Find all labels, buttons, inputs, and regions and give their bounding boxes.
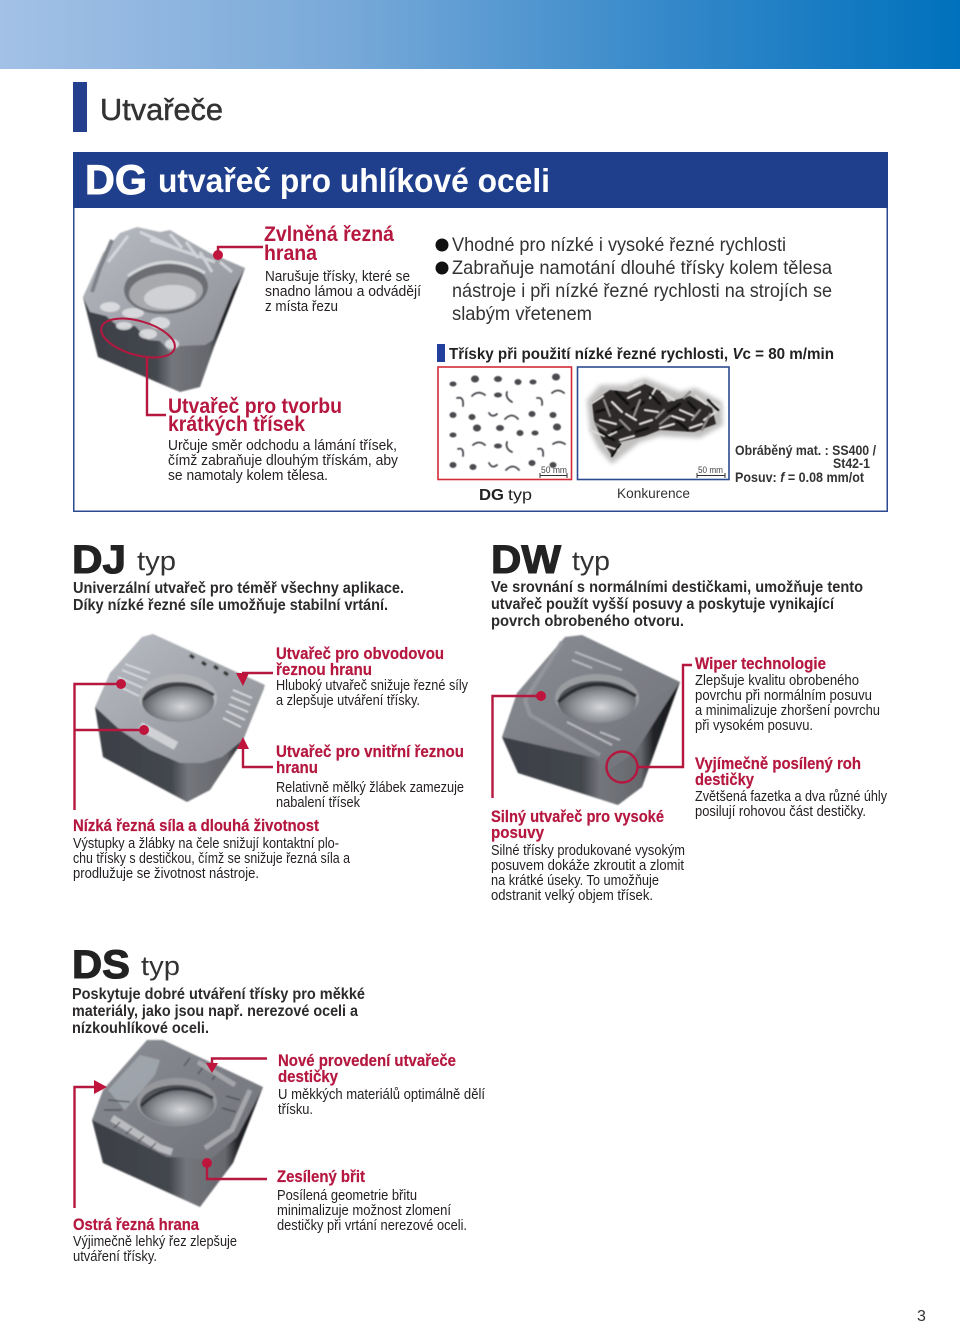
callout: DW strong former: na krátké úseky. To umožňuje [491, 873, 659, 889]
bullet list: slabým vřetenem [452, 303, 592, 325]
insert photo: DJ [95, 634, 265, 802]
heading: DJ type: Díky nízké řezné síle umožňuje stabilní vrtání. [73, 597, 388, 614]
bullet list: Zabraňuje namotání dlouhé třísky kolem tělesa [452, 257, 832, 279]
callout: DW wiper and corner [606, 654, 888, 820]
callout: DJ peripheral edge former: Hluboký utvařeč snižuje řezné síly [276, 678, 469, 694]
callout: DJ inner edge former [237, 737, 464, 811]
callout: DW wiper and corner: destičky [695, 770, 754, 789]
callout: DW strong former: posuvy [491, 823, 544, 842]
callout: DW wiper and corner: a minimalizuje zhoršení povrchu [695, 703, 880, 719]
callout: DJ peripheral edge former: Utvařeč pro obvodovou [276, 644, 444, 663]
panel heading [73, 152, 888, 208]
cutting conditions: St42-1 [833, 455, 870, 471]
callout: DS new design [206, 1051, 485, 1118]
callout: DJ peripheral edge former: řeznou hranu [276, 660, 372, 679]
callout: DW wiper and corner: Zlepšuje kvalitu obrobeného [695, 673, 859, 689]
insert photo: DW [502, 635, 680, 805]
chip photo captions [479, 485, 690, 504]
chip photo captions: Konkurence [617, 485, 690, 501]
callout: DS reinforced edge: Zesílený břit [277, 1167, 365, 1186]
callout: DW strong former: Silný utvařeč pro vysoké [491, 807, 664, 826]
heading: DS type: materiály, jako jsou např. nerezové oceli a [72, 1003, 358, 1020]
cutting conditions: Posuv: f = 0.08 mm/ot [735, 469, 864, 485]
callout: DW strong former: Silné třísky produkované vysokým [491, 843, 685, 859]
bullet list: nástroje i při nízké řezné rychlosti na strojích se [452, 280, 832, 302]
heading: DW type [491, 538, 863, 630]
callouts: DJ low cutting force: prodlužuje se životnost nástroje. [73, 866, 259, 882]
heading: DW type: utvařeč použít vyšší posuvy a poskytuje vynikající [491, 596, 835, 613]
callout: DJ peripheral edge former [236, 644, 469, 709]
heading: DJ type: Univerzální utvařeč pro téměř všechny aplikace. [73, 580, 404, 597]
callout: wavy cutting edge: hrana [264, 242, 317, 265]
callouts: DJ low cutting force [73, 679, 351, 882]
callout: DS sharp edge: utváření třísky. [73, 1249, 157, 1265]
callout: wavy cutting edge: snadno lámou a odvádějí [265, 284, 421, 300]
chip photo: DG type [438, 367, 572, 480]
callout: short-chip former: Určuje směr odchodu a lámání třísek, [168, 438, 397, 454]
callout: DW wiper and corner: Wiper technologie [695, 654, 826, 673]
heading: DW type: Ve srovnání s normálními destičkami, umožňuje tento [491, 579, 863, 596]
callout: DW wiper and corner: povrchu při normálním posuvu [695, 688, 872, 704]
callout: wavy cutting edge [213, 223, 421, 315]
callout: wavy cutting edge: Zvlněná řezná [264, 223, 394, 246]
callout: short-chip former: čímž zabraňuje dlouhým třískám, aby [168, 453, 399, 469]
title: Utvařeče [73, 82, 223, 132]
heading: DJ type: DJ [72, 538, 126, 582]
chip photo: competitor [578, 367, 729, 480]
heading: DS type: nízkouhlíkové oceli. [72, 1020, 209, 1037]
callout: DW strong former: odstranit velký objem třísek. [491, 888, 653, 904]
heading: DW type: typ [572, 546, 610, 576]
callout: DS reinforced edge: minimalizuje možnost zlomení [277, 1203, 451, 1219]
callout: short-chip former: krátkých třísek [168, 413, 305, 436]
callout: DW strong former [491, 691, 685, 904]
callout: DW wiper and corner: při vysokém posuvu. [695, 718, 813, 734]
title: Utvařeče: Utvařeče [100, 92, 223, 127]
heading: DS type: Poskytuje dobré utváření třísky pro měkké [72, 986, 365, 1003]
panel heading: utvařeč pro uhlíkové oceli [158, 162, 550, 199]
insert photo: DG [83, 227, 245, 392]
cutting conditions: Obráběný mat. : SS400 / [735, 442, 876, 458]
chip photo captions: DG [479, 487, 504, 504]
callout: DJ inner edge former: Utvařeč pro vnitřní řeznou [276, 742, 464, 761]
heading: DS type [72, 943, 365, 1037]
cutting conditions [735, 442, 876, 485]
callout: DJ inner edge former: nabalení třísek [276, 795, 361, 811]
heading: DJ type: typ [137, 546, 176, 576]
callout: DS new design: třísku. [278, 1102, 313, 1118]
callout: DS new design: Nové provedení utvařeče [278, 1051, 456, 1070]
callout: DJ inner edge former: hranu [276, 758, 318, 777]
callouts: DJ low cutting force: Výstupky a žlábky na čele snižují kontaktní plo- [73, 836, 339, 852]
chip comparison heading: Třísky při použití nízké řezné rychlosti, Vc = 80 m/min [449, 346, 834, 363]
callout: DW wiper and corner: Vyjímečně posílený roh [695, 754, 861, 773]
callout: wavy cutting edge: Narušuje třísky, které se [265, 269, 410, 285]
callout: DW wiper and corner: Zvětšená fazetka a dva různé úhly [695, 789, 888, 805]
callout: DS sharp edge: Výjimečně lehký řez zlepšuje [73, 1234, 237, 1250]
callout: DS reinforced edge: destičky při vrtání nerezové oceli. [277, 1218, 467, 1234]
panel heading: DG [85, 156, 147, 203]
bullet list: Vhodné pro nízké i vysoké řezné rychlosti [452, 234, 786, 256]
callout: short-chip former: Utvařeč pro tvorbu [168, 395, 342, 418]
heading: DW type: DW [491, 538, 561, 582]
callout: DJ inner edge former: Relativně mělký žlábek zamezuje [276, 780, 464, 796]
panel: DG chipbreaker [73, 152, 888, 511]
callout: short-chip former: se namotaly kolem tělesa. [168, 468, 328, 484]
callout: DW strong former: posuvem dokáže zkroutit a zlomit [491, 858, 684, 874]
callout: DJ peripheral edge former: a zlepšuje utváření třísky. [276, 693, 420, 709]
chip photo captions: typ [508, 487, 532, 504]
heading: DW type: povrch obrobeného otvoru. [491, 613, 684, 630]
callout: DS new design: destičky [278, 1067, 338, 1086]
callout: wavy cutting edge: z místa řezu [265, 299, 338, 315]
callout: DS reinforced edge: Posílená geometrie břitu [277, 1188, 417, 1204]
callout: DW wiper and corner: posilují rohovou část destičky. [695, 804, 866, 820]
callout: DS sharp edge: Ostrá řezná hrana [73, 1215, 199, 1234]
scale bars [540, 465, 725, 478]
callouts: DJ low cutting force: Nízká řezná síla a dlouhá životnost [73, 816, 319, 835]
callouts: DJ low cutting force: chu třísky s destičkou, čímž se snižuje řezná síla a [73, 851, 351, 867]
scale bars: 50 mm [541, 465, 567, 476]
insert photo: DS [92, 1040, 263, 1207]
callout: short-chip former [97, 311, 399, 484]
heading: DS type: DS [72, 943, 130, 987]
callout: DS sharp edge [73, 1080, 237, 1265]
callout: DS reinforced edge [202, 1158, 467, 1234]
header gradient band [0, 0, 960, 69]
bullet list [436, 234, 832, 325]
heading: DJ type [72, 538, 404, 614]
callout: DS new design: U měkkých materiálů optimálně dělí [278, 1087, 485, 1103]
scale bars: 50 mm [698, 465, 723, 476]
heading: DS type: typ [141, 951, 180, 981]
